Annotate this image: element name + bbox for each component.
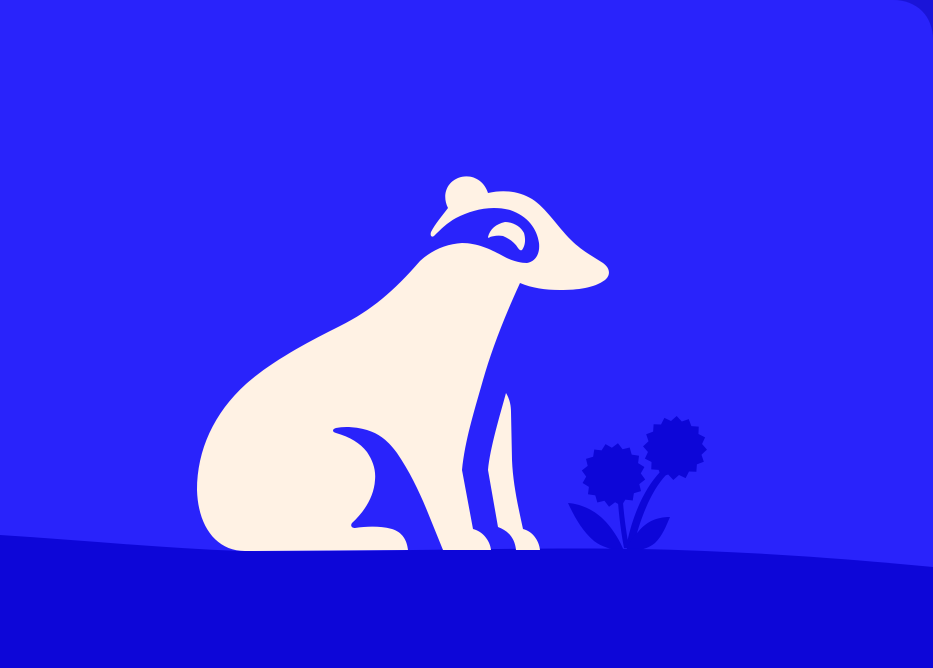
icon: dandelions bbox=[568, 414, 709, 551]
badger hind leg bbox=[488, 393, 540, 550]
dandelion right leaf bbox=[626, 517, 670, 551]
dandelion left leaf bbox=[568, 503, 624, 551]
badger body and head bbox=[197, 176, 609, 551]
ground bbox=[0, 535, 933, 668]
dandelion stems bbox=[618, 472, 666, 548]
dandelion flower left bbox=[577, 439, 650, 511]
badger eye bbox=[488, 222, 525, 250]
badger bbox=[197, 176, 609, 551]
dandelion flower right bbox=[641, 414, 709, 482]
